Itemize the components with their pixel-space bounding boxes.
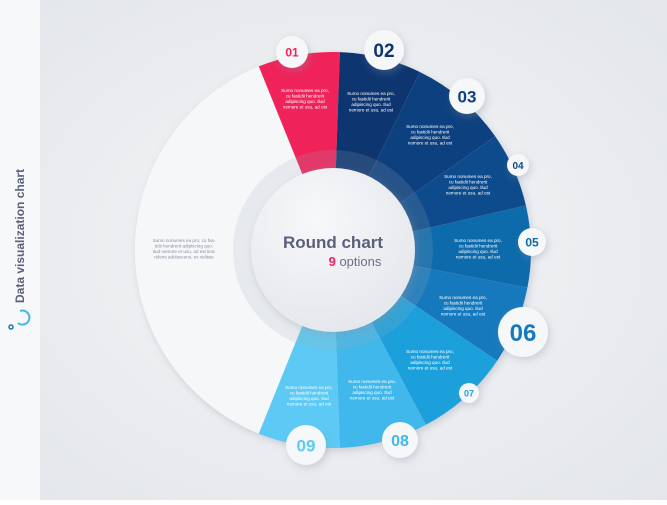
icon: ring logo — [9, 311, 29, 329]
segment 02 — [333, 52, 420, 250]
segment texts: Sumo nonumes ea pro, — [285, 385, 333, 390]
segment texts: adipiscing quo. Ilud — [448, 185, 488, 190]
number badges: 05 — [525, 236, 539, 250]
segment texts: cu fastidii hendrerit — [290, 390, 329, 396]
segment texts: nemore et usu, ad est — [446, 190, 491, 196]
segment texts: cu fastidii hendrerit — [444, 300, 483, 306]
number badges: 02 — [373, 41, 395, 62]
round chart — [135, 52, 531, 448]
segment texts: nemore et usu, ad est — [456, 254, 501, 260]
white segment text: Sumo nonumes ea pro, cu fas- — [153, 238, 215, 243]
white segment text: tidii hendrerit adipiscing quo. — [155, 244, 213, 248]
segment texts: nemore et usu, ad est — [350, 396, 395, 400]
segment texts: cu fastidii hendrerit — [449, 180, 488, 184]
number badges: 04 — [512, 161, 524, 172]
number badges — [276, 30, 548, 465]
center title: Round chart — [283, 233, 383, 252]
segment 03 — [333, 72, 495, 250]
segment texts: nemore et usu, ad est — [349, 108, 394, 112]
segment texts: cu fastidii hendrerit — [352, 96, 391, 102]
white segment text: Ilud nemore et usu, ad est tinic — [153, 249, 216, 254]
segment texts: adipiscing quo. Ilud — [289, 396, 329, 401]
segment 06 — [333, 250, 527, 361]
segment texts: Sumo nonumes ea pro, — [348, 379, 396, 384]
segment texts: nemore et usu, ad est — [408, 366, 453, 370]
segment texts: adipiscing quo. Ilud — [458, 249, 498, 254]
center circle — [251, 168, 415, 332]
segment texts: Sumo nonumes ea pro, — [406, 124, 454, 129]
segment texts: cu fastidii hendrerit — [411, 354, 450, 360]
segment texts: adipiscing quo. Ilud — [285, 99, 325, 104]
number badges: 07 — [464, 388, 474, 398]
segment texts: cu fastidii hendrerit — [411, 130, 450, 134]
segment 09 — [259, 250, 340, 448]
segment texts: Sumo nonumes ea pro, — [281, 88, 329, 93]
number badges: 09 — [297, 436, 315, 456]
segment texts: Sumo nonumes ea pro, — [406, 349, 454, 354]
segment texts: nemore et usu, ad est — [441, 312, 486, 316]
center subtitle: 9 options — [329, 254, 382, 269]
segment texts — [281, 88, 502, 406]
segment texts: Sumo nonumes ea pro, — [454, 238, 502, 243]
segment 04 — [333, 136, 526, 250]
segment 05 — [333, 206, 531, 288]
segment texts: Sumo nonumes ea pro, — [439, 295, 487, 300]
sidebar — [0, 0, 40, 500]
segment texts: adipiscing quo. Ilud — [410, 360, 450, 365]
segment texts: nemore et usu, ad est — [283, 104, 328, 110]
number badges: 06 — [510, 320, 536, 347]
segment texts: nemore et usu, ad est — [287, 402, 332, 406]
segment texts: Sumo nonumes ea pro, — [347, 91, 395, 96]
segment texts: Sumo nonumes ea pro, — [444, 174, 492, 179]
segment texts: adipiscing quo. Ilud — [443, 306, 483, 311]
segment texts: cu fastidii hendrerit — [353, 384, 392, 390]
number badges: 03 — [458, 88, 476, 106]
white segment text: ridens adolescens, ex vidisse — [154, 254, 214, 260]
segment texts: adipiscing quo. Ilud — [352, 390, 392, 395]
segment 07 — [333, 250, 497, 425]
segment texts: cu fastidii hendrerit — [459, 244, 498, 248]
number badges: 01 — [285, 46, 299, 60]
segment texts: nemore et usu, ad est — [408, 140, 453, 146]
number badges: 08 — [391, 433, 409, 450]
sidebar title: Data visualization chart — [13, 169, 27, 303]
segment texts: adipiscing quo. Ilud — [351, 102, 391, 107]
segment texts: adipiscing quo. Ilud — [410, 135, 450, 140]
segment 01 — [259, 52, 340, 250]
segment texts: cu fastidii hendrerit — [286, 94, 325, 98]
segment 08 — [333, 250, 426, 448]
segment: white (text block) — [135, 66, 333, 434]
